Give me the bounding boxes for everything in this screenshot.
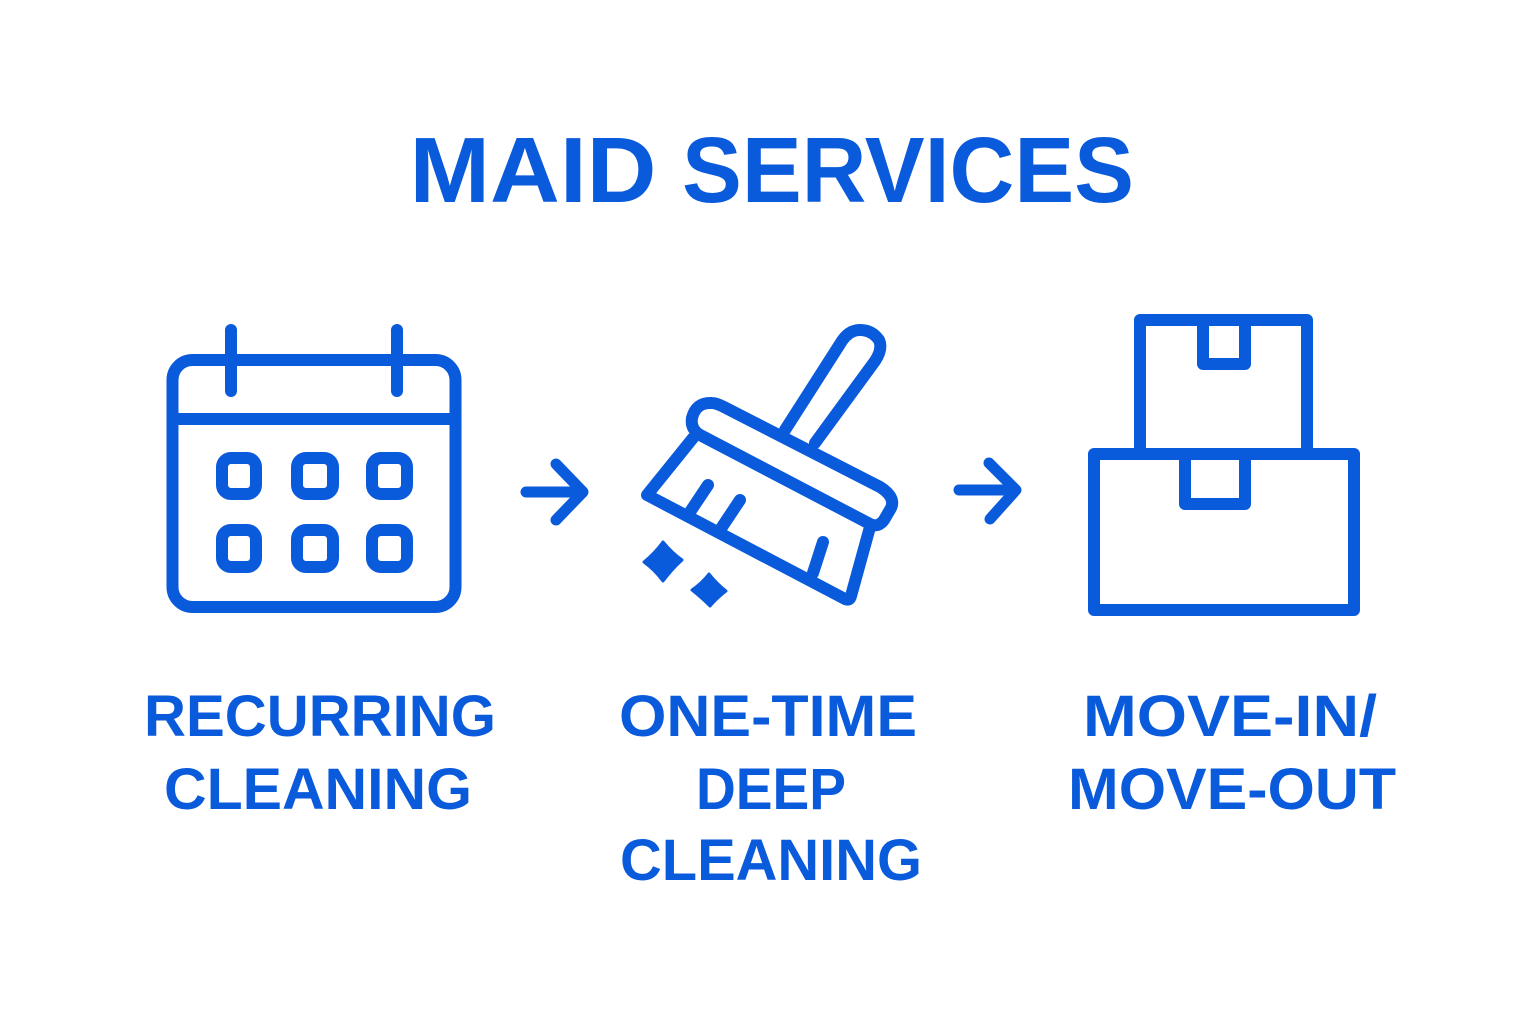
- label: move-in / move-out: [1068, 684, 1396, 822]
- label: one-time deep cleaning: [619, 684, 922, 893]
- title: [410, 118, 1134, 222]
- icon: sparkles: [644, 542, 726, 606]
- icon: calendar: [172, 330, 456, 607]
- label: recurring cleaning: CLEANING: [164, 757, 472, 822]
- label: recurring cleaning: [144, 684, 496, 822]
- icon: stacked boxes: [1094, 320, 1354, 610]
- label: move-in / move-out: MOVE-IN/: [1083, 684, 1377, 749]
- arrow: broom to boxes: [959, 463, 1016, 519]
- label: move-in / move-out: MOVE-OUT: [1068, 757, 1396, 822]
- label: one-time deep cleaning: CLEANING: [620, 828, 922, 893]
- label: recurring cleaning: RECURRING: [144, 684, 496, 749]
- label: one-time deep cleaning: ONE-TIME: [619, 684, 917, 749]
- title: SERVICES: [682, 118, 1134, 222]
- label: one-time deep cleaning: DEEP: [696, 757, 846, 822]
- icon: broom: [647, 330, 892, 600]
- arrow: calendar to broom: [526, 464, 583, 520]
- title: MAID: [410, 118, 656, 222]
